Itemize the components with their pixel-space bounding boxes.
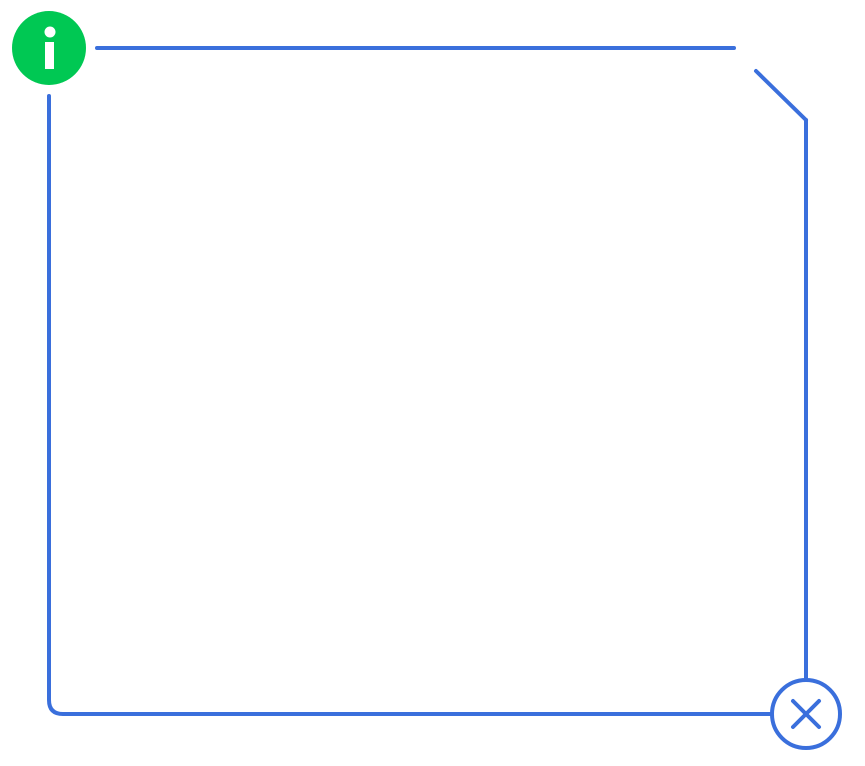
frame outline [49, 48, 806, 714]
icon: close [772, 680, 840, 748]
icon: info [12, 11, 86, 85]
